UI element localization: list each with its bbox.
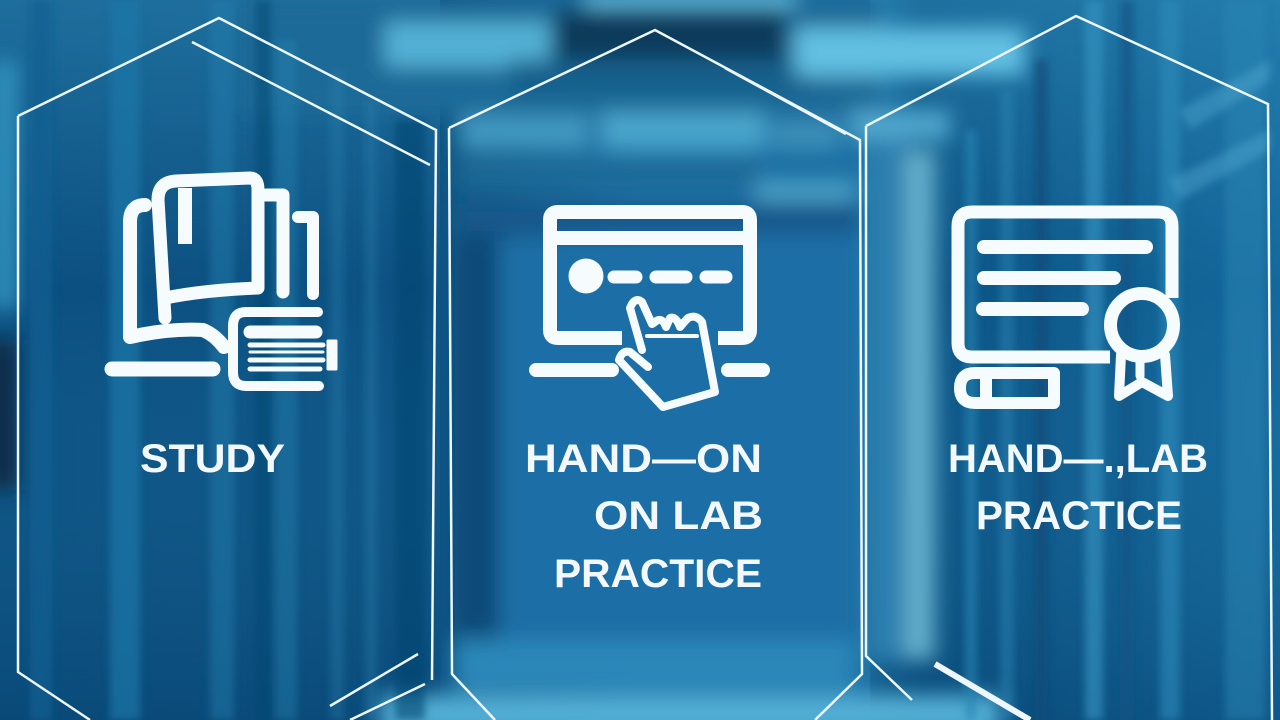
panel: study hexagon xyxy=(18,18,436,720)
panel: hand-on lab practice hexagon xyxy=(449,30,862,720)
heading: hand-on on lab practice: HAND—ON xyxy=(525,437,762,481)
icon: laptop with pointer hand xyxy=(536,212,763,407)
heading: hand-lab practice xyxy=(948,437,1208,538)
icon: books xyxy=(112,178,336,386)
heading: study: STUDY xyxy=(140,437,285,481)
icon: certificate screen xyxy=(958,212,1174,403)
panel: lab practice hexagon xyxy=(866,16,1272,720)
heading: hand-on on lab practice: PRACTICE xyxy=(554,552,762,596)
heading: hand-lab practice: HAND—.,LAB xyxy=(948,437,1208,481)
heading: hand-on on lab practice xyxy=(525,437,763,596)
heading: hand-lab practice: PRACTICE xyxy=(976,494,1182,538)
heading: hand-on on lab practice: ON LAB xyxy=(594,494,763,538)
